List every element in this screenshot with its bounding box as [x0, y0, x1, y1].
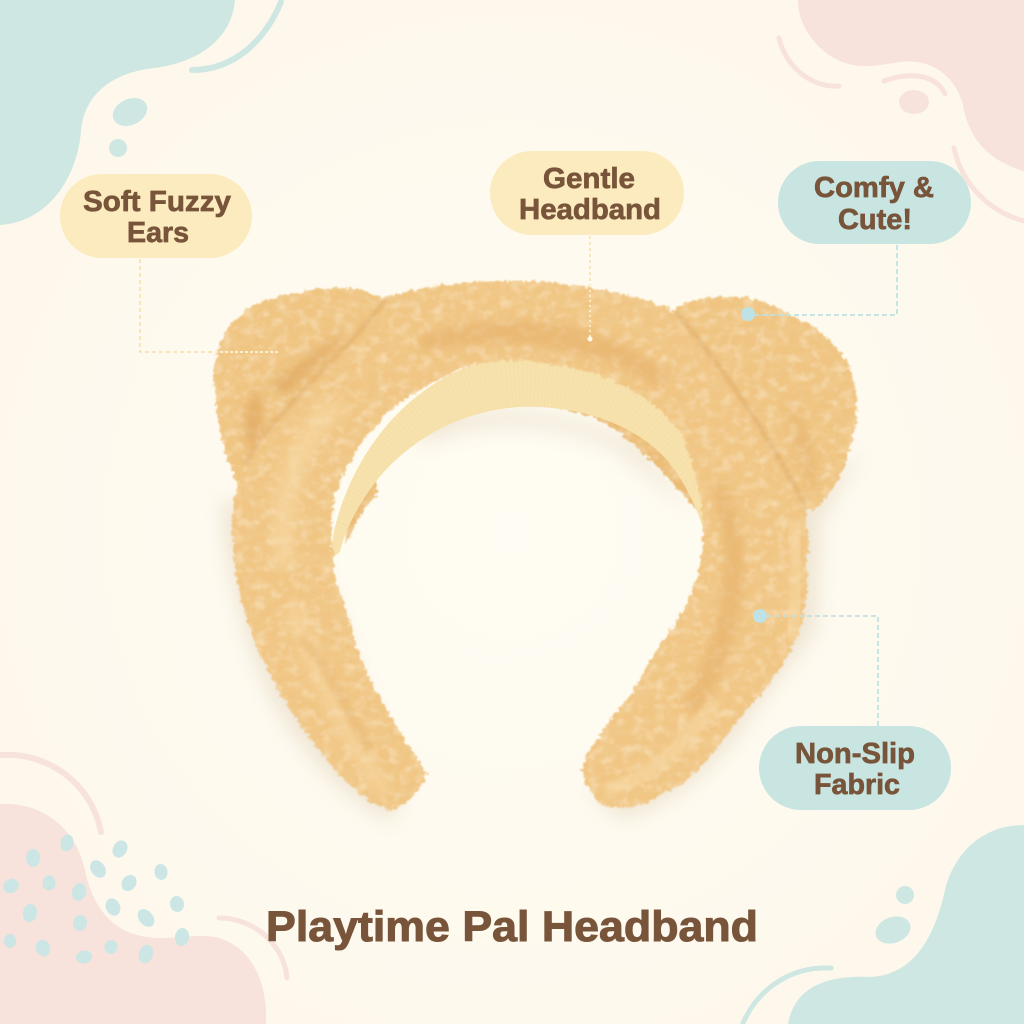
- decoration: bottom-right teal blob: [743, 825, 1024, 1024]
- label: Gentle Headband: [490, 151, 684, 235]
- label: Non-Slip Fabric: [759, 726, 951, 810]
- leader line: gentle headband: [588, 236, 592, 342]
- label: Non-Slip Fabric: Non-Slip: [795, 738, 915, 770]
- label: Soft Fuzzy Ears: [60, 174, 252, 258]
- title: Playtime Pal Headband: [266, 903, 758, 951]
- main fur band: [232, 281, 808, 810]
- decoration: bottom-left pink blob: [0, 755, 287, 1024]
- label: Comfy and Cute: Comfy &: [814, 172, 934, 204]
- label: Soft Fuzzy Ears: Ears: [127, 217, 189, 249]
- label: Comfy and Cute: [778, 161, 971, 244]
- back fur behind the band: [345, 400, 712, 545]
- decoration: top-left teal blob: [0, 0, 281, 225]
- label: Non-Slip Fabric: Fabric: [814, 769, 900, 801]
- label: Soft Fuzzy Ears: Soft Fuzzy: [83, 186, 231, 218]
- fur tone shading: [245, 300, 805, 795]
- decoration: top-right pink blob: [779, 0, 1024, 221]
- ear shading: [245, 330, 816, 495]
- headband product: [214, 281, 862, 822]
- label: Gentle Headband: Gentle: [543, 163, 635, 195]
- right ear: [672, 297, 856, 510]
- label: Gentle Headband: Headband: [519, 194, 661, 226]
- leader line: comfy and cute: [741, 245, 897, 321]
- leader line: non-slip fabric: [753, 609, 878, 726]
- label: Comfy and Cute: Cute!: [838, 204, 912, 236]
- leader line: soft fuzzy ears: [140, 259, 280, 352]
- decoration: confetti dots: [1, 833, 190, 965]
- ribbed underside: [330, 355, 715, 565]
- left ear: [214, 288, 382, 482]
- soft shadow: [222, 411, 862, 822]
